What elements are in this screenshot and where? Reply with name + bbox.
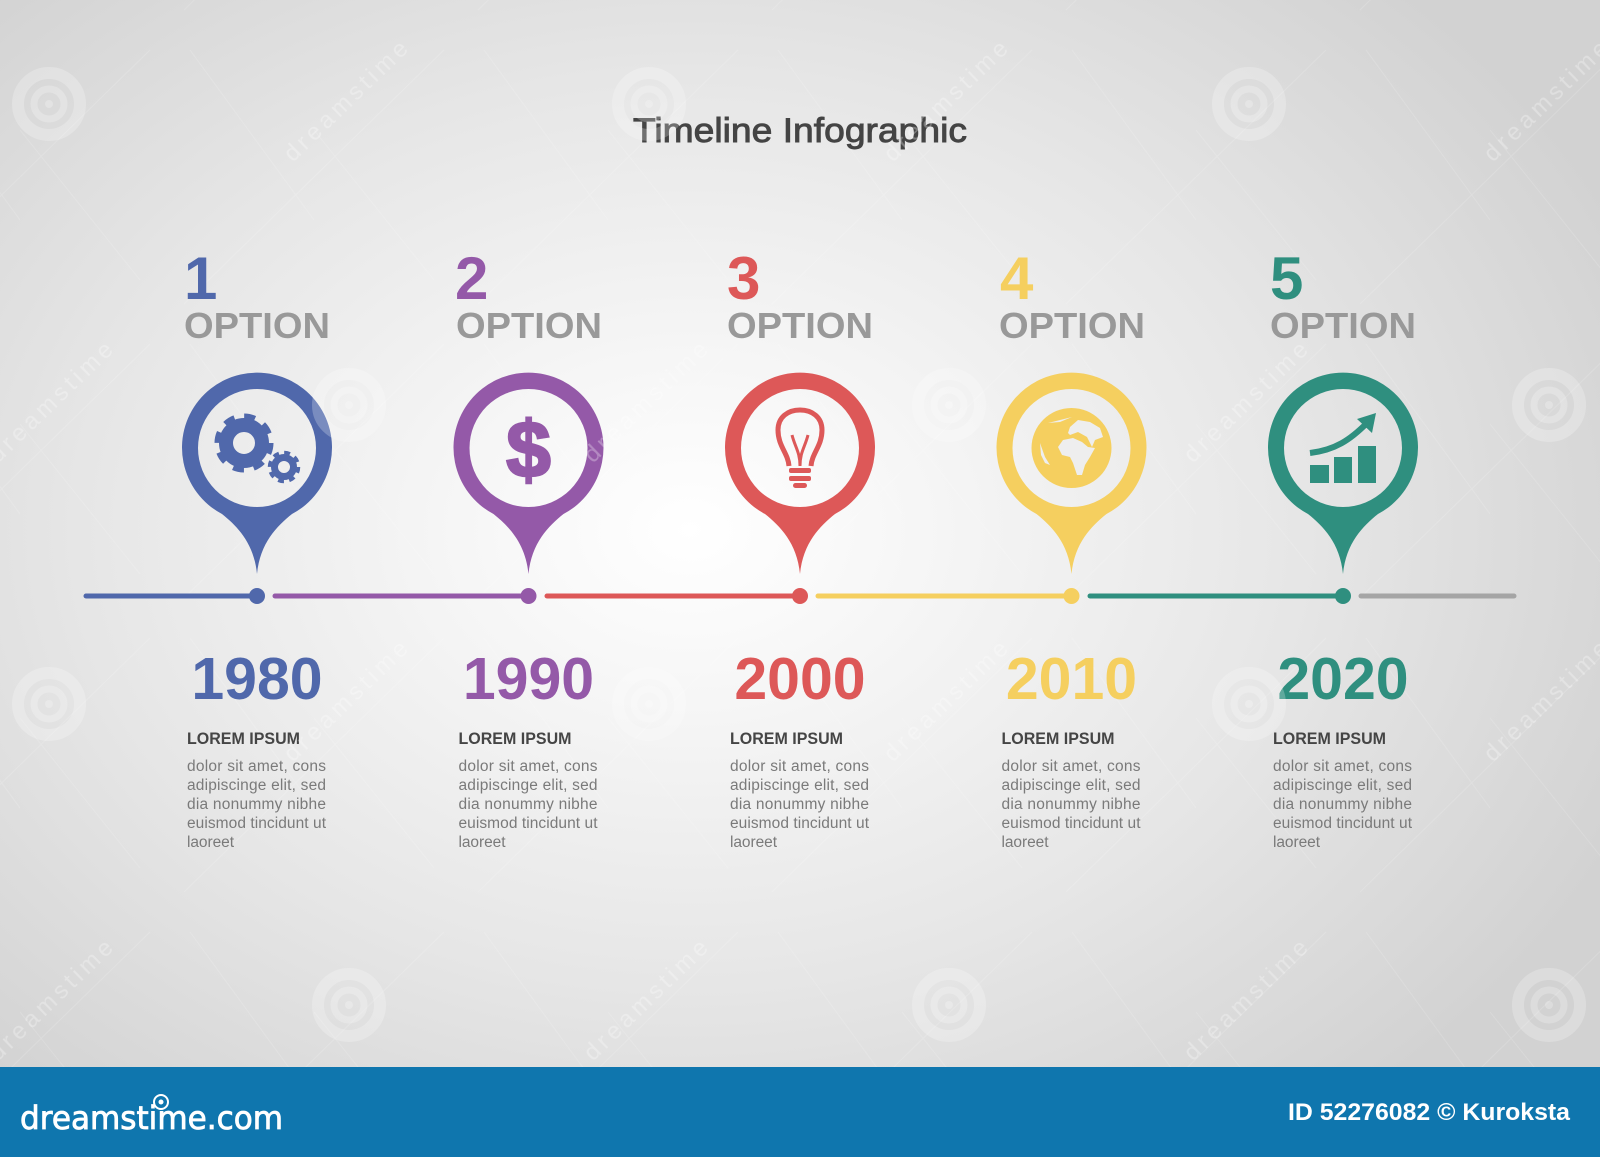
text block 5	[1273, 729, 1413, 851]
text block 4: LOREM IPSUM	[1002, 729, 1114, 748]
text block 1: dolor sit amet, cons	[187, 758, 326, 775]
option 3 heading: OPTION	[727, 305, 873, 346]
text block 4: dolor sit amet, cons	[1002, 758, 1141, 775]
text block 5: LOREM IPSUM	[1273, 729, 1386, 748]
segment 5	[1090, 588, 1351, 604]
year 2000: 2000	[734, 646, 866, 712]
footer credit: ID 52276082 © Kuroksta	[1288, 1099, 1571, 1126]
title: Timeline Infographic	[633, 112, 967, 150]
text block 2: dia nonummy nibhe	[458, 796, 598, 813]
pin 3: light bulb	[725, 373, 875, 574]
icon: light bulb	[778, 410, 822, 488]
text block 5: dolor sit amet, cons	[1273, 758, 1412, 775]
text block 2: LOREM IPSUM	[458, 729, 572, 748]
timeline	[86, 588, 1514, 604]
text block 1	[187, 729, 327, 851]
watermark text: dreamstime	[278, 635, 414, 767]
watermark text: dreamstime	[578, 336, 714, 468]
text block 4: adipiscinge elit, sed	[1002, 777, 1140, 794]
option 5 heading	[1270, 245, 1416, 346]
option 4 heading	[999, 245, 1145, 346]
text block 5: euismod tincidunt ut	[1273, 815, 1413, 832]
footer logo: dreamstime.com	[20, 1099, 283, 1137]
text block 4	[1002, 729, 1141, 851]
option 2 heading: 2	[455, 245, 488, 312]
option 5 heading: 5	[1270, 245, 1303, 312]
option 5 heading: OPTION	[1270, 305, 1416, 346]
text block 4: dia nonummy nibhe	[1002, 796, 1140, 813]
text block 3: euismod tincidunt ut	[730, 815, 870, 832]
pin 5: growth chart	[1268, 373, 1418, 574]
watermark text: dreamstime	[1178, 336, 1314, 468]
watermark text: dreamstime	[578, 934, 714, 1066]
text block 2: euismod tincidunt ut	[458, 815, 598, 832]
text block 5: adipiscinge elit, sed	[1273, 777, 1412, 794]
text block 1: dia nonummy nibhe	[187, 796, 326, 813]
option 1 heading: 1	[184, 245, 217, 312]
option 3 heading	[727, 245, 873, 346]
text block 1: laoreet	[187, 834, 235, 851]
footer bar	[0, 1067, 1600, 1157]
segment 3	[547, 588, 808, 604]
pin 2: dollar	[454, 373, 604, 574]
option 1 heading	[184, 245, 330, 346]
option 4 heading: OPTION	[999, 305, 1145, 346]
text block 5: dia nonummy nibhe	[1273, 796, 1412, 813]
text block 2: adipiscinge elit, sed	[458, 777, 598, 794]
years	[191, 646, 1409, 712]
segment 4	[818, 588, 1080, 604]
watermark text: dreamstime	[878, 35, 1014, 167]
year 2020: 2020	[1277, 646, 1409, 712]
text block 2: laoreet	[458, 834, 506, 851]
pin 1: gears	[182, 373, 332, 574]
segment 6	[1361, 594, 1514, 598]
year 2010: 2010	[1006, 646, 1137, 712]
icon: gears	[217, 416, 298, 482]
text block 4: euismod tincidunt ut	[1002, 815, 1141, 832]
text block 1: LOREM IPSUM	[187, 729, 300, 748]
text block 3	[730, 729, 870, 851]
text block 5: laoreet	[1273, 834, 1321, 851]
option 1 heading: OPTION	[184, 305, 330, 346]
text block 3: dia nonummy nibhe	[730, 796, 869, 813]
icon: globe	[1032, 408, 1112, 488]
icon: growth chart	[1310, 413, 1376, 483]
text block 1: euismod tincidunt ut	[187, 815, 327, 832]
text block 4: laoreet	[1002, 834, 1049, 851]
watermark text: dreamstime	[278, 35, 414, 167]
text block 2	[458, 729, 598, 851]
text block 3: dolor sit amet, cons	[730, 758, 869, 775]
option 2 heading	[455, 245, 602, 346]
year 1980: 1980	[191, 646, 323, 712]
text block 2: dolor sit amet, cons	[458, 758, 598, 775]
option 4 heading: 4	[1000, 245, 1034, 312]
option 2 heading: OPTION	[456, 305, 602, 346]
pin 4: globe	[996, 373, 1146, 574]
option 3 heading: 3	[727, 245, 760, 312]
segment 2	[275, 588, 536, 604]
watermark text: dreamstime	[1178, 934, 1314, 1066]
icon: dollar sign: $	[506, 405, 551, 494]
text block 1: adipiscinge elit, sed	[187, 777, 326, 794]
year 1990: 1990	[463, 646, 594, 712]
text block 3: LOREM IPSUM	[730, 729, 843, 748]
segment 1	[86, 588, 265, 604]
text block 3: adipiscinge elit, sed	[730, 777, 869, 794]
watermark text: dreamstime	[878, 635, 1014, 767]
text block 3: laoreet	[730, 834, 778, 851]
